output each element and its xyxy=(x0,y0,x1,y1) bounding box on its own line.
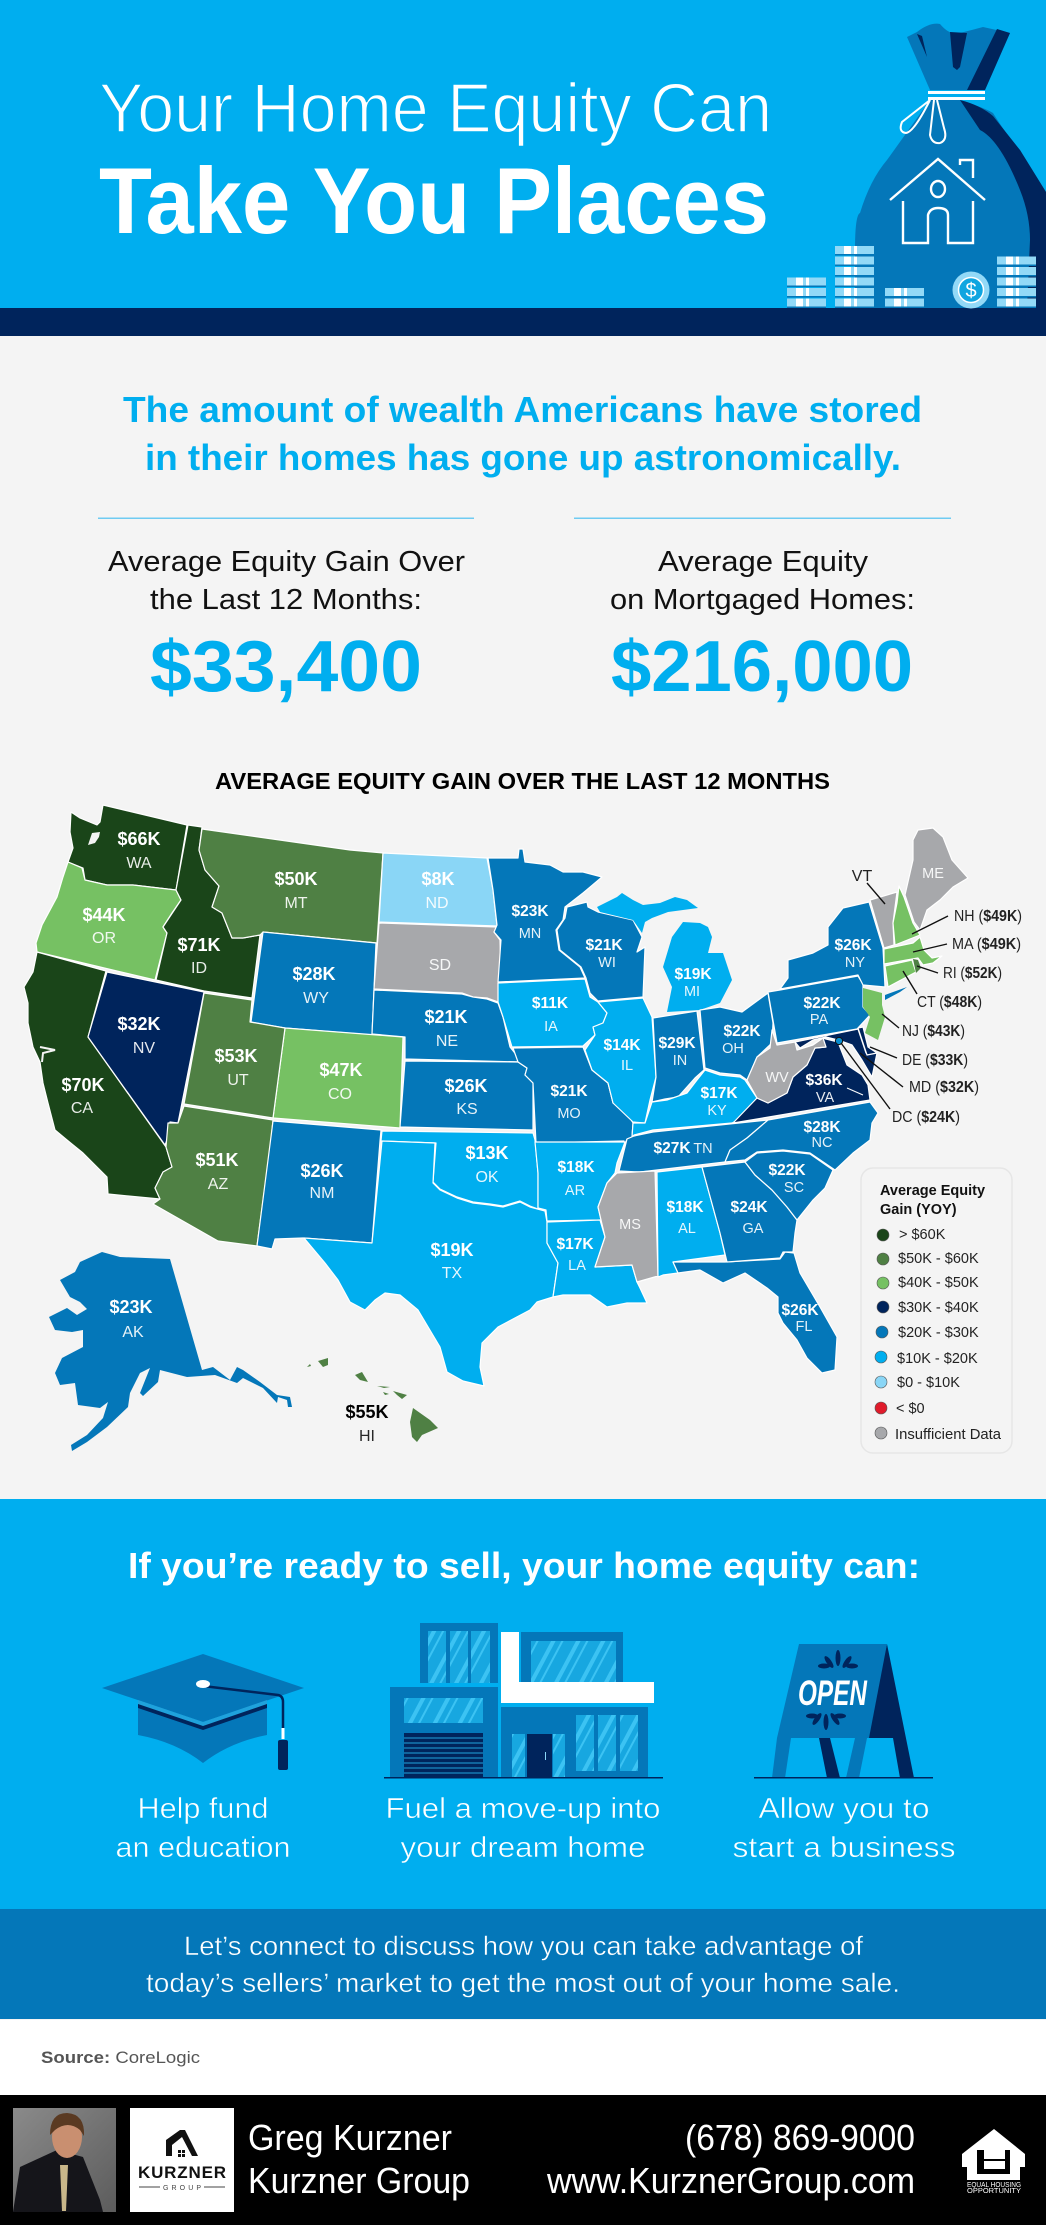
state: TN xyxy=(619,1120,768,1172)
map legend xyxy=(861,1168,1012,1453)
callout: DC xyxy=(841,1043,960,1126)
map legend: > $60K xyxy=(899,1227,946,1243)
callout: RI: RI ($52K) xyxy=(943,965,1002,982)
call to action band xyxy=(0,1909,1046,2019)
state: UT: UT xyxy=(227,1072,249,1089)
footer xyxy=(0,2095,1046,2225)
state: TX: TX xyxy=(442,1265,463,1282)
stat: average equity on mortgaged homes xyxy=(574,518,951,707)
icon: money bag with house xyxy=(787,24,1046,309)
state: OK xyxy=(381,1131,538,1209)
state: TN: $27K xyxy=(653,1140,691,1157)
state: AL: $18K xyxy=(666,1199,704,1216)
stat: average equity gain: $33,400 xyxy=(150,627,422,707)
state: IN: $29K xyxy=(658,1035,696,1052)
stat: average equity gain: the Last 12 Months: xyxy=(150,584,422,616)
callout: NH: NH ($49K) xyxy=(954,908,1022,925)
state: PA xyxy=(768,976,870,1043)
state: MO xyxy=(513,1047,633,1155)
title line 2: Take You Places xyxy=(99,148,769,253)
map title: AVERAGE EQUITY GAIN OVER THE LAST 12 MONTHS xyxy=(215,768,830,794)
call to action band: Let’s connect to discuss how you can take advantage of xyxy=(184,1931,864,1961)
state: GA: GA xyxy=(743,1221,764,1237)
state: WA: $66K xyxy=(117,829,161,849)
subheading: The amount of wealth Americans have stored xyxy=(123,389,922,430)
state: NM: NM xyxy=(310,1185,334,1202)
agent name: Kurzner Group xyxy=(248,2160,470,2201)
state: ID xyxy=(156,825,260,998)
state: MO: $21K xyxy=(550,1083,588,1100)
state: IN xyxy=(652,1011,704,1102)
caption: dream home xyxy=(386,1793,660,1864)
state: LA: $17K xyxy=(556,1236,594,1253)
state: FL: $26K xyxy=(781,1302,819,1319)
state: KS: $26K xyxy=(444,1076,488,1096)
callout: NJ xyxy=(882,1014,965,1040)
callout: DC: DC ($24K) xyxy=(892,1109,960,1126)
caption: education xyxy=(116,1793,290,1864)
state: HI xyxy=(307,1358,438,1445)
state: MN: MN xyxy=(519,926,541,942)
state: IN: IN xyxy=(673,1053,687,1069)
callout: MD: MD ($32K) xyxy=(909,1079,979,1096)
state: AR: AR xyxy=(565,1183,585,1199)
state: AZ xyxy=(153,1106,273,1246)
state: ID: $71K xyxy=(177,935,221,955)
state: AK: $23K xyxy=(109,1297,153,1317)
state: CA: $70K xyxy=(61,1075,105,1095)
state: AK xyxy=(49,1252,292,1451)
state: OH xyxy=(700,993,773,1080)
state: WI: $21K xyxy=(585,937,623,954)
state: NY: NY xyxy=(845,955,865,971)
header banner xyxy=(0,0,1046,336)
state: AZ: $51K xyxy=(195,1150,239,1170)
state: VT xyxy=(870,892,897,948)
state: GA: $24K xyxy=(730,1199,768,1216)
state: TX xyxy=(304,1141,558,1386)
state: OK: $13K xyxy=(465,1143,509,1163)
state: PA: $22K xyxy=(803,995,841,1012)
state: AK: AK xyxy=(122,1324,144,1341)
company logo xyxy=(130,2108,234,2212)
state: HI: HI xyxy=(359,1428,375,1445)
state: IL: IL xyxy=(621,1058,633,1074)
state: NM: $26K xyxy=(300,1161,344,1181)
state: KY: KY xyxy=(707,1103,727,1119)
state: WI: WI xyxy=(598,955,616,971)
state: NH xyxy=(893,886,920,945)
callout: RI xyxy=(917,965,1002,982)
state: ME xyxy=(905,828,968,930)
state: MI: $19K xyxy=(674,966,712,983)
state: VA: VA xyxy=(816,1090,834,1106)
state: KS xyxy=(400,1061,533,1130)
state: OR: $44K xyxy=(82,905,126,925)
state: NJ xyxy=(863,988,885,1040)
map legend: Insufficient Data xyxy=(895,1427,1002,1443)
callout: MD xyxy=(860,1053,979,1096)
stat: average equity on mortgaged homes: Average Equity xyxy=(658,546,869,578)
state: OK: OK xyxy=(475,1169,499,1186)
state: VA: $36K xyxy=(805,1072,843,1089)
icon: open sign xyxy=(754,1644,933,1778)
icon: open sign: OPEN xyxy=(798,1674,867,1713)
map legend: Gain (YOY) xyxy=(880,1202,957,1218)
state: NC xyxy=(725,1102,878,1170)
state: NE: NE xyxy=(436,1033,458,1050)
state: NV: $32K xyxy=(117,1014,161,1034)
icon: modern house xyxy=(384,1623,663,1778)
state: MD xyxy=(795,1029,877,1077)
caption: dream home: your dream home xyxy=(400,1832,646,1864)
state: WA xyxy=(68,805,187,890)
stat: average equity gain xyxy=(98,518,474,707)
state: LA: LA xyxy=(568,1258,586,1274)
source panel xyxy=(0,2020,1046,2095)
subheading xyxy=(123,389,922,478)
icon: equal housing opportunity xyxy=(962,2129,1025,2195)
state: AZ: AZ xyxy=(208,1176,228,1193)
coin stacks: $ xyxy=(965,280,977,302)
caption: education: Help fund xyxy=(138,1793,268,1825)
state: CO: $47K xyxy=(319,1060,363,1080)
company logo: KURZNER xyxy=(138,2163,226,2182)
state: WY: WY xyxy=(303,990,329,1007)
state: CA: CA xyxy=(71,1100,93,1117)
state: IA: $11K xyxy=(532,995,569,1012)
map legend: < $0 xyxy=(896,1401,925,1417)
state: MI xyxy=(597,893,732,1012)
state: FL: FL xyxy=(796,1319,812,1335)
map legend: Average Equity xyxy=(880,1183,985,1199)
state: GA xyxy=(702,1162,797,1262)
state: CO xyxy=(273,1028,403,1128)
state: IA: IA xyxy=(544,1019,558,1035)
state: CA xyxy=(24,952,172,1199)
state: MI: MI xyxy=(684,984,700,1000)
state: UT: $53K xyxy=(214,1046,258,1066)
stat: average equity gain: Average Equity Gain Over xyxy=(108,546,465,578)
agent name xyxy=(248,2117,470,2201)
callout: VT xyxy=(852,868,885,904)
icon: equal housing opportunity: OPPORTUNITY xyxy=(967,2186,1021,2195)
state: NM xyxy=(257,1121,381,1249)
coin stacks xyxy=(787,245,1036,308)
agent name: Greg Kurzner xyxy=(248,2117,452,2158)
callout: DE: DE ($33K) xyxy=(902,1052,968,1069)
state: SC xyxy=(745,1151,833,1220)
callout: MA: MA ($49K) xyxy=(952,936,1021,953)
map legend: $40K - $50K xyxy=(898,1275,979,1291)
map legend: $50K - $60K xyxy=(898,1251,979,1267)
state: VA xyxy=(733,1038,870,1123)
state: LA xyxy=(547,1220,647,1307)
callout: DE xyxy=(870,1047,968,1069)
state: MT: MT xyxy=(284,895,308,912)
state: ND xyxy=(379,853,497,926)
state: OR: OR xyxy=(92,930,116,947)
state: NV: NV xyxy=(133,1040,155,1057)
callout: VT: VT xyxy=(852,868,872,885)
state: ID: ID xyxy=(191,960,207,977)
state: NE: $21K xyxy=(424,1007,468,1027)
state: MT: $50K xyxy=(274,869,318,889)
state: WI xyxy=(557,902,645,1001)
callout: NJ: NJ ($43K) xyxy=(902,1023,965,1040)
state: NY: $26K xyxy=(834,937,872,954)
panel: if you're ready to sell xyxy=(0,1499,1046,1909)
state: SD: SD xyxy=(429,957,451,974)
caption: dream home: Fuel a move-up into xyxy=(386,1793,660,1825)
state: NE xyxy=(372,990,522,1062)
caption: business: start a business xyxy=(732,1832,956,1864)
state: TN: TN xyxy=(693,1141,713,1157)
map legend: $0 - $10K xyxy=(897,1375,960,1391)
state: OR xyxy=(36,862,181,980)
state: AR xyxy=(535,1142,625,1221)
call to action band: today’s sellers’ market to get the most out of your home sale. xyxy=(146,1968,900,1998)
state: MT xyxy=(199,829,383,943)
caption: business xyxy=(732,1793,956,1864)
state: WV: WV xyxy=(765,1070,789,1086)
state: NV xyxy=(88,972,204,1145)
callout: MA xyxy=(913,936,1021,953)
contact details: (678) 869-9000 xyxy=(685,2117,915,2158)
state: KS: KS xyxy=(456,1101,478,1118)
state: MN xyxy=(488,849,602,982)
state: NC: NC xyxy=(812,1135,832,1151)
icon: graduation cap xyxy=(102,1654,304,1770)
state: ME: ME xyxy=(922,866,944,882)
caption: education: an education xyxy=(116,1832,290,1864)
state: MN: $23K xyxy=(511,903,549,920)
callout: NH xyxy=(912,908,1022,934)
heading: If you’re ready to sell, your home equity can: xyxy=(128,1545,920,1586)
state: CT xyxy=(885,960,916,987)
caption: business: Allow you to xyxy=(758,1793,930,1825)
state: UT xyxy=(184,993,285,1118)
contact details xyxy=(546,2117,915,2201)
contact details: www.KurznerGroup.com xyxy=(546,2160,915,2201)
callout: CT xyxy=(903,971,982,1011)
state: ND: $8K xyxy=(421,869,455,889)
state: RI xyxy=(913,959,921,973)
state: DC marker xyxy=(835,1037,843,1045)
state: PA: PA xyxy=(810,1012,828,1028)
state: SC: $22K xyxy=(768,1162,806,1179)
state: AR: $18K xyxy=(557,1159,595,1176)
state: IL xyxy=(585,998,656,1123)
stat: average equity on mortgaged homes: $216,000 xyxy=(611,627,913,707)
state: WA: WA xyxy=(126,855,152,872)
subheading: in their homes has gone up astronomically. xyxy=(145,437,901,478)
state: MS xyxy=(595,1171,658,1282)
state: KY: $17K xyxy=(700,1085,738,1102)
state: TX: $19K xyxy=(430,1240,474,1260)
state: SD xyxy=(374,923,501,1002)
state: OH: OH xyxy=(722,1041,744,1057)
map legend: $20K - $30K xyxy=(898,1325,979,1341)
stat: average equity on mortgaged homes: on Mortgaged Homes: xyxy=(610,584,915,616)
state: HI: $55K xyxy=(345,1402,389,1422)
agent photo xyxy=(13,2108,116,2212)
state: SC: SC xyxy=(784,1180,804,1196)
title line 1: Your Home Equity Can xyxy=(99,69,772,147)
state: AL xyxy=(657,1167,725,1277)
state: NC: $28K xyxy=(803,1119,841,1136)
source panel: Source: CoreLogic xyxy=(41,2048,201,2067)
callout: CT: CT ($48K) xyxy=(917,994,982,1011)
icon: equal housing opportunity: EQUAL HOUSING xyxy=(967,2180,1021,2189)
state: WY xyxy=(251,932,376,1035)
map: equity gain by state xyxy=(24,805,968,1451)
state: WV xyxy=(747,1030,826,1103)
state: IA xyxy=(498,979,607,1047)
state: FL xyxy=(673,1252,837,1373)
state: WY: $28K xyxy=(292,964,336,984)
state: KY xyxy=(632,1070,757,1137)
state: MO: MO xyxy=(557,1106,581,1122)
state: NY xyxy=(780,902,907,1000)
map legend: $10K - $20K xyxy=(897,1351,978,1367)
map callouts: small eastern states xyxy=(841,868,1022,1126)
state: ND: ND xyxy=(425,895,449,912)
state: OH: $22K xyxy=(723,1023,761,1040)
company logo: GROUP xyxy=(163,2185,201,2192)
state: CO: CO xyxy=(328,1086,352,1103)
state: MA xyxy=(884,937,942,965)
state: AL: AL xyxy=(678,1221,696,1237)
state: DE xyxy=(858,1027,877,1055)
map legend: $30K - $40K xyxy=(898,1300,979,1316)
state: IL: $14K xyxy=(603,1037,641,1054)
state: MS: MS xyxy=(619,1217,641,1233)
